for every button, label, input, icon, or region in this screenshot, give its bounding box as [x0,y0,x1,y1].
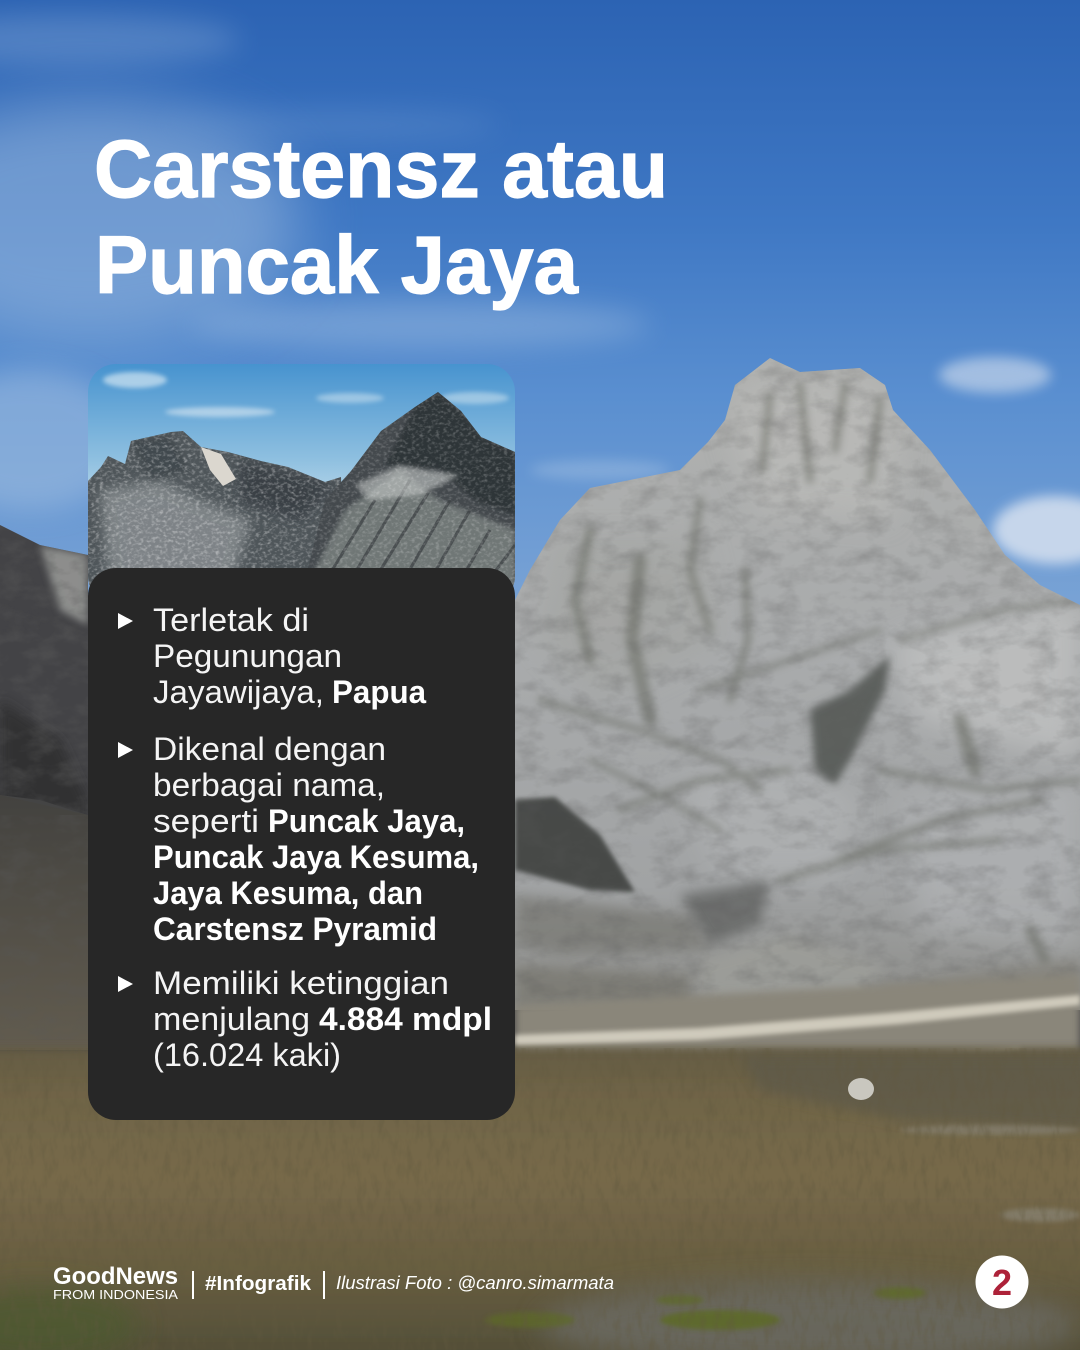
logo: GoodNews from Indonesia: GoodNews [53,1263,178,1290]
height text: 4.884 mdpl [319,1001,492,1037]
rock strata [540,385,1080,960]
logo: GoodNews from Indonesia [53,1263,178,1302]
bullet 1: location [118,602,426,710]
location text: Terletak di [153,602,309,638]
text panel [88,568,515,1120]
photo snow patch [201,447,236,486]
location text: Jayawijaya, [153,674,324,710]
names text: Dikenal dengan [153,731,386,767]
title: Carstensz atau [94,124,668,215]
title [94,124,668,311]
inset photo: Puncak Jaya peaks [88,364,520,605]
height text: menjulang [153,1001,310,1037]
height text: (16.024 kaki) [153,1037,341,1073]
names text: Jaya Kesuma, dan [153,875,423,911]
icon: bullet arrow [118,613,133,629]
bullet 3: height [118,965,492,1073]
road streak [515,995,1080,1046]
gravel foreground [515,975,1080,1075]
names text: Carstensz Pyramid [153,911,437,947]
hashtag: #Infografik [205,1273,312,1295]
title: Puncak Jaya [95,220,579,311]
main limestone mountain [515,350,1080,1020]
gravel slope left [0,795,88,1050]
page number badge [976,1256,1028,1308]
location text: Pegunungan [153,638,342,674]
sky [0,0,1080,640]
location text [153,602,426,710]
location text: Papua [332,674,426,710]
photo credit: Ilustrasi Foto : @canro.simarmata [336,1273,614,1293]
clouds [0,14,1080,564]
names text: seperti [153,803,259,839]
grass field [0,1048,1080,1350]
names text: Puncak Jaya, [268,803,465,839]
photo left peak [88,431,342,586]
bullet 2: names [118,731,479,947]
left dark ridge [0,520,88,820]
names text [153,731,479,947]
footer credits [53,1263,614,1302]
photo right peak [308,392,515,586]
boulder [848,1078,874,1100]
height text: Memiliki ketinggian [153,965,449,1001]
page number badge: 2 [992,1262,1012,1303]
icon: bullet arrow [118,976,133,992]
names text: Puncak Jaya Kesuma, [153,839,479,875]
names text: berbagai nama, [153,767,385,803]
photo sky [88,364,515,604]
icon: bullet arrow [118,742,133,758]
logo: GoodNews from Indonesia: FROM INDONESIA [53,1287,178,1302]
height text [153,965,492,1073]
